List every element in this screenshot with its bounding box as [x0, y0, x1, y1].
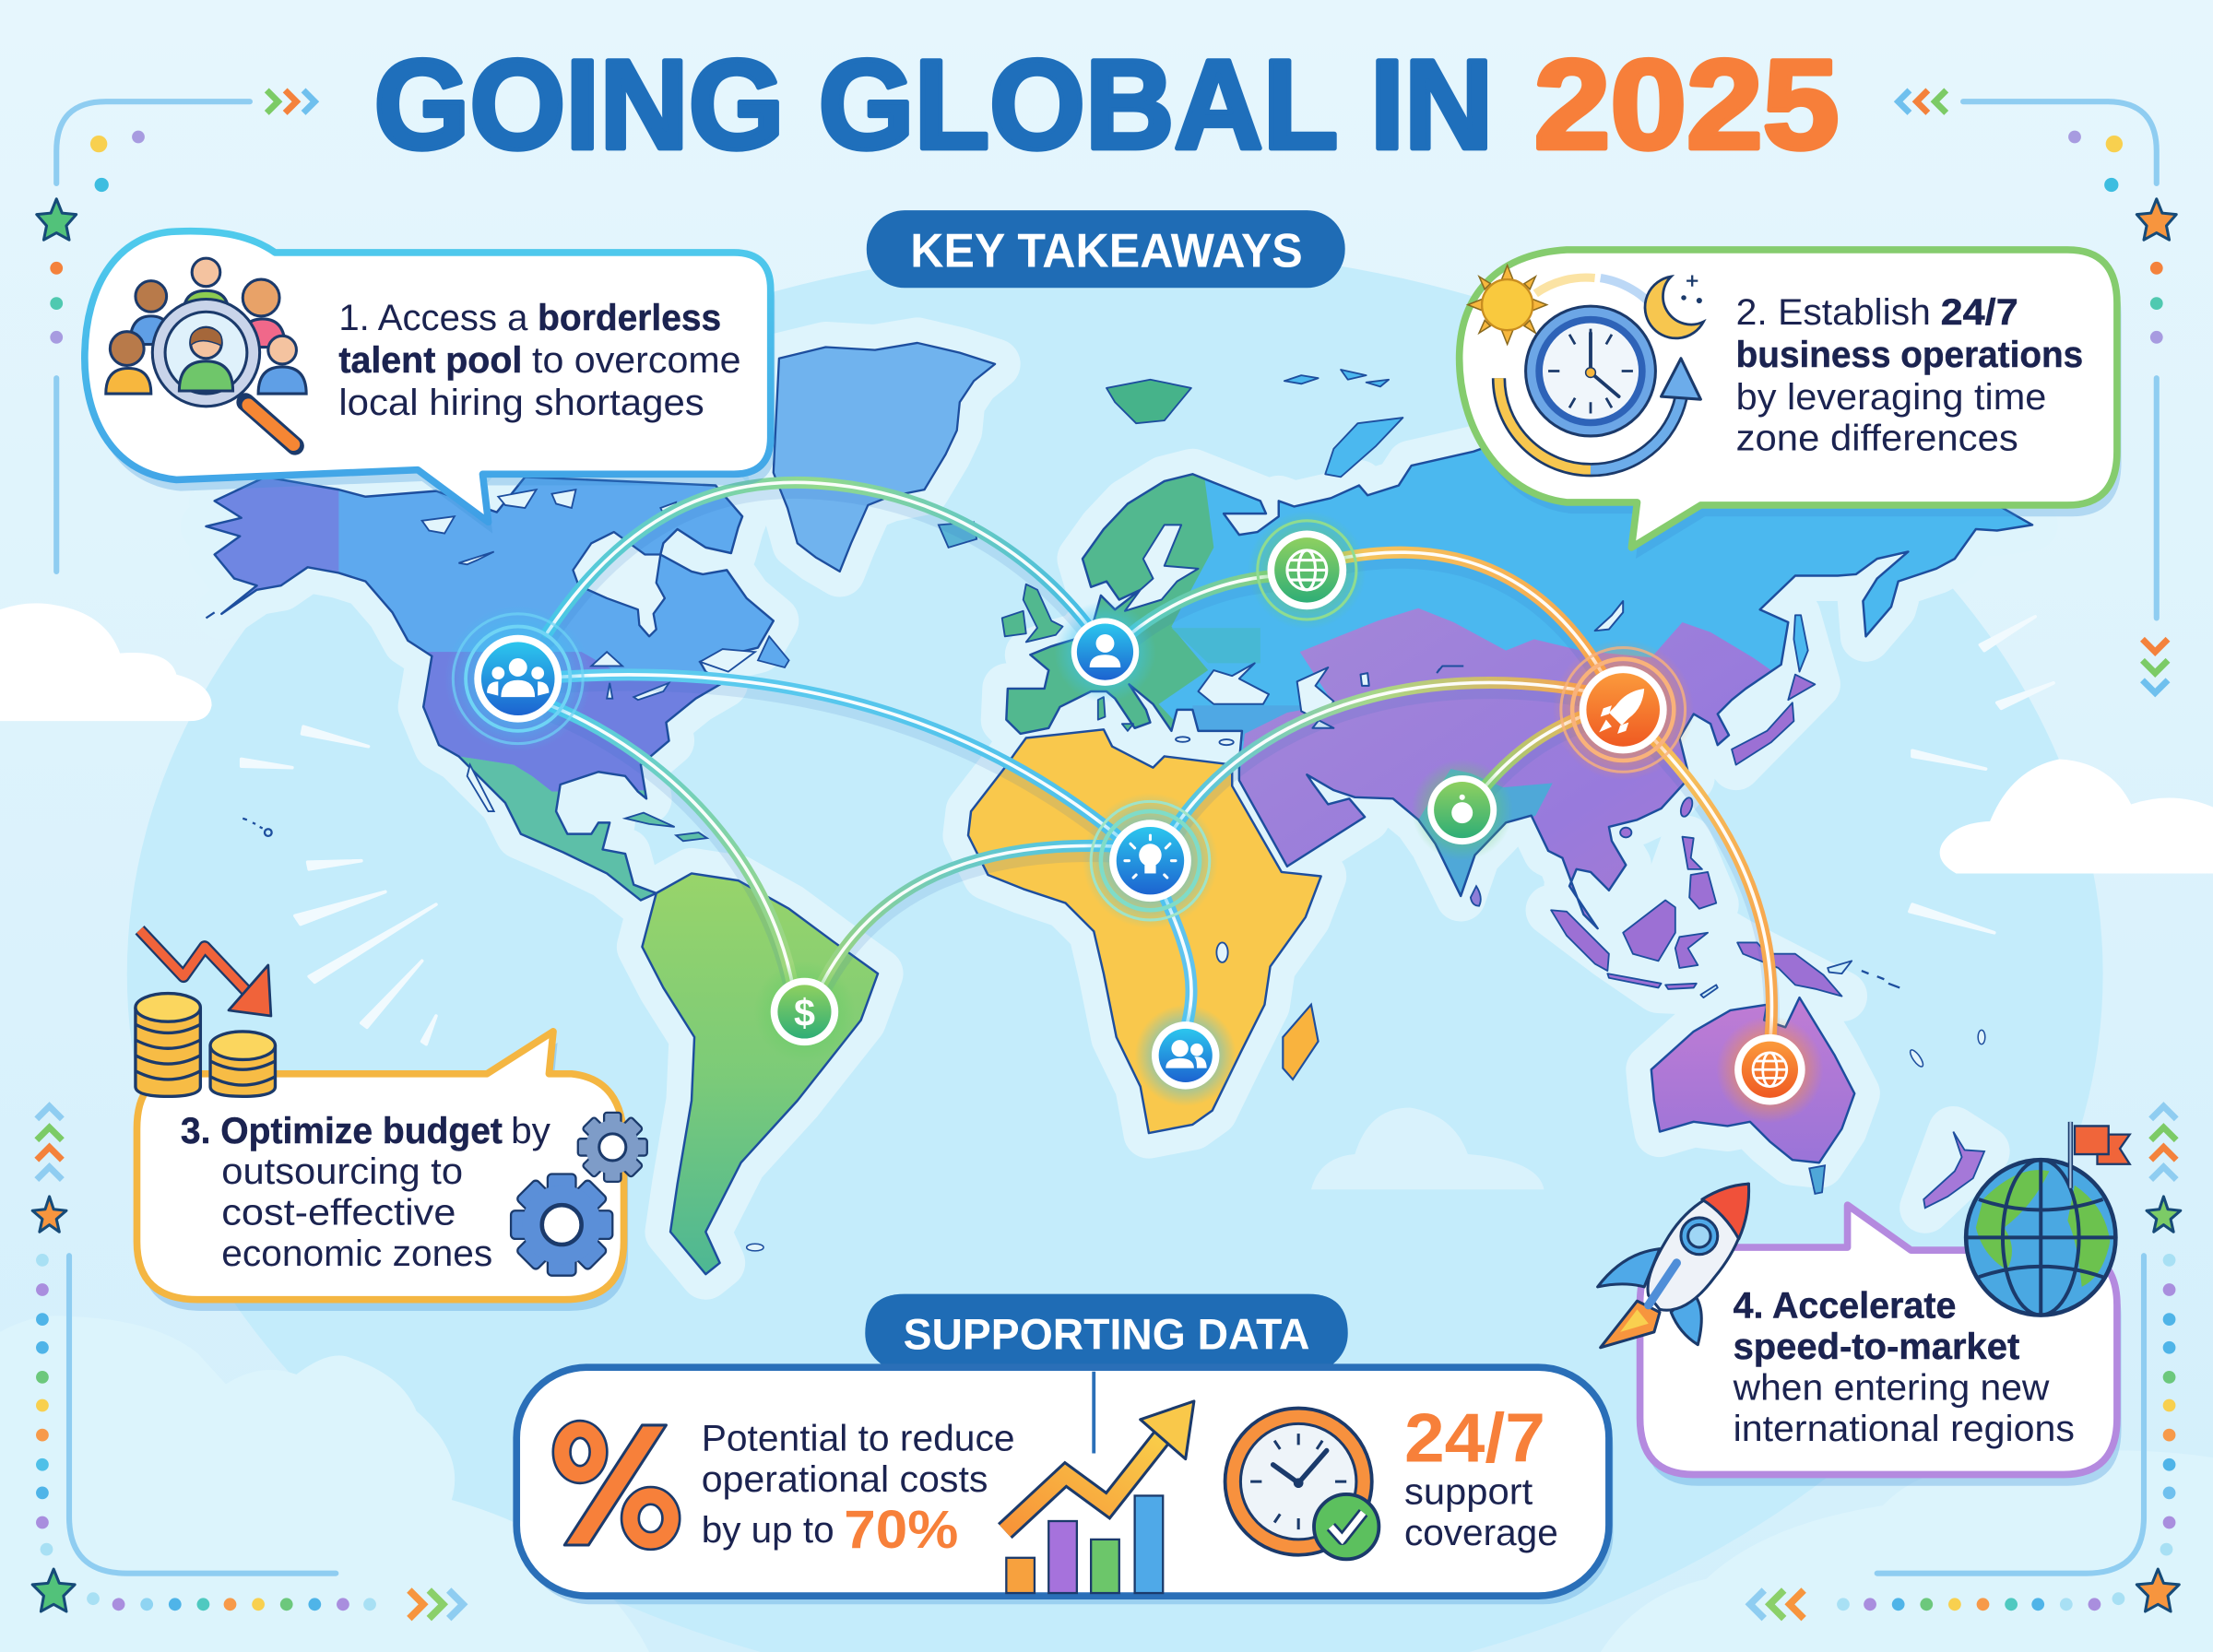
South America — [642, 873, 878, 1274]
text: 24/7 coverage: support — [1404, 1472, 1533, 1513]
node: South America dollar — [753, 961, 856, 1063]
text: takeaway 3: cost-effective — [221, 1193, 456, 1233]
title: 2025 — [1534, 34, 1839, 176]
decorative frame top-left — [37, 90, 314, 572]
text: takeaway 4: speed-to-market — [1734, 1327, 2019, 1367]
callout 1: talent pool — [85, 231, 775, 534]
section label: supporting data: SUPPORTING DATA — [904, 1310, 1309, 1359]
text: cost reduction: Potential to reduce — [702, 1418, 1015, 1458]
icon: clock with sun and moon — [1468, 266, 1703, 470]
decorative frame top-right — [1899, 90, 2176, 693]
text: cost reduction: 70% — [844, 1500, 958, 1560]
section label: supporting data — [865, 1294, 1348, 1375]
callout 2: 24/7 operations — [1460, 250, 2122, 559]
text: takeaway 2: 2. Establish — [1736, 292, 1931, 333]
text: takeaway 1: to overcome — [532, 340, 741, 381]
Australia and New Zealand — [1651, 997, 1985, 1208]
text: cost reduction: by up to — [702, 1510, 834, 1551]
text: takeaway 2: business operations — [1736, 335, 2083, 375]
icon: downward arrow — [140, 930, 271, 1016]
Greenland and Iceland — [774, 343, 995, 572]
icon: growth chart — [1005, 1401, 1194, 1593]
text: takeaway 1: talent pool — [338, 340, 522, 381]
text: cost reduction: operational costs — [702, 1459, 988, 1500]
panel: supporting data — [516, 1294, 1613, 1604]
text: takeaway 3: outsourcing to — [221, 1151, 463, 1192]
map halo — [206, 343, 2032, 1274]
node: southern Africa people — [1135, 1005, 1237, 1106]
text: takeaway 2: zone differences — [1736, 418, 2018, 458]
connection arcs — [548, 482, 1771, 1053]
Africa — [968, 729, 1321, 1133]
decorative frame bottom-left — [32, 1106, 463, 1619]
text: cost reduction — [702, 1418, 1015, 1560]
text: takeaway 3: 3. Optimize budget — [181, 1111, 503, 1151]
text: takeaway 1 — [338, 298, 741, 423]
section label: key takeaways — [867, 210, 1345, 288]
text: takeaway 3: by — [511, 1111, 550, 1151]
icon: coins — [136, 994, 275, 1096]
text: takeaway 2 — [1736, 292, 2083, 458]
icon: globe with flag — [1966, 1122, 2130, 1316]
node: green globe — [1248, 511, 1367, 630]
sunburst rays — [242, 617, 2053, 1044]
icon: people under magnifier — [106, 258, 306, 446]
inland seas — [1125, 525, 1623, 728]
Eurasia — [974, 370, 2032, 997]
text: 24/7 coverage: 24/7 — [1404, 1399, 1545, 1477]
node: India — [1412, 759, 1513, 861]
text: takeaway 4: when entering new — [1733, 1367, 2050, 1408]
node: South America dollar: $ — [794, 992, 815, 1034]
icon: clock with check — [1225, 1409, 1379, 1559]
arc shadows — [548, 491, 1771, 1053]
callout 3: optimize budget — [136, 930, 647, 1311]
text: takeaway 1: borderless — [538, 298, 721, 338]
text: takeaway 4: 4. Accelerate — [1734, 1286, 1956, 1327]
text: takeaway 3 — [181, 1111, 550, 1274]
clouds — [0, 603, 2213, 1652]
node: USA talent — [444, 606, 591, 752]
text: takeaway 1: local hiring shortages — [338, 383, 704, 423]
icon: percent — [562, 1425, 671, 1545]
text: 24/7 coverage — [1404, 1399, 1558, 1553]
text: takeaway 2: by leveraging time — [1736, 377, 2046, 418]
world map — [197, 343, 2032, 1274]
islands — [1002, 370, 1852, 997]
North America — [197, 466, 789, 917]
node: rocket — [1553, 639, 1694, 780]
node: Australia globe — [1716, 1016, 1824, 1123]
text: takeaway 1: 1. Access a — [338, 298, 528, 338]
title: GOING GLOBAL IN — [374, 34, 1493, 176]
icon: gears — [511, 1113, 647, 1276]
node: Africa lightbulb — [1083, 793, 1218, 928]
text: 24/7 coverage: coverage — [1404, 1513, 1558, 1553]
decorative frame bottom-right — [1750, 1106, 2181, 1619]
node: Europe person — [1054, 601, 1156, 702]
icon: rocket — [1598, 1184, 1749, 1348]
text: takeaway 3: economic zones — [221, 1233, 492, 1274]
callout 4: speed to market — [1598, 1122, 2130, 1486]
text: takeaway 4: international regions — [1734, 1409, 2075, 1449]
text: takeaway 4 — [1733, 1286, 2075, 1449]
text: takeaway 2: 24/7 — [1941, 292, 2018, 333]
section label: key takeaways: KEY TAKEAWAYS — [910, 224, 1303, 277]
